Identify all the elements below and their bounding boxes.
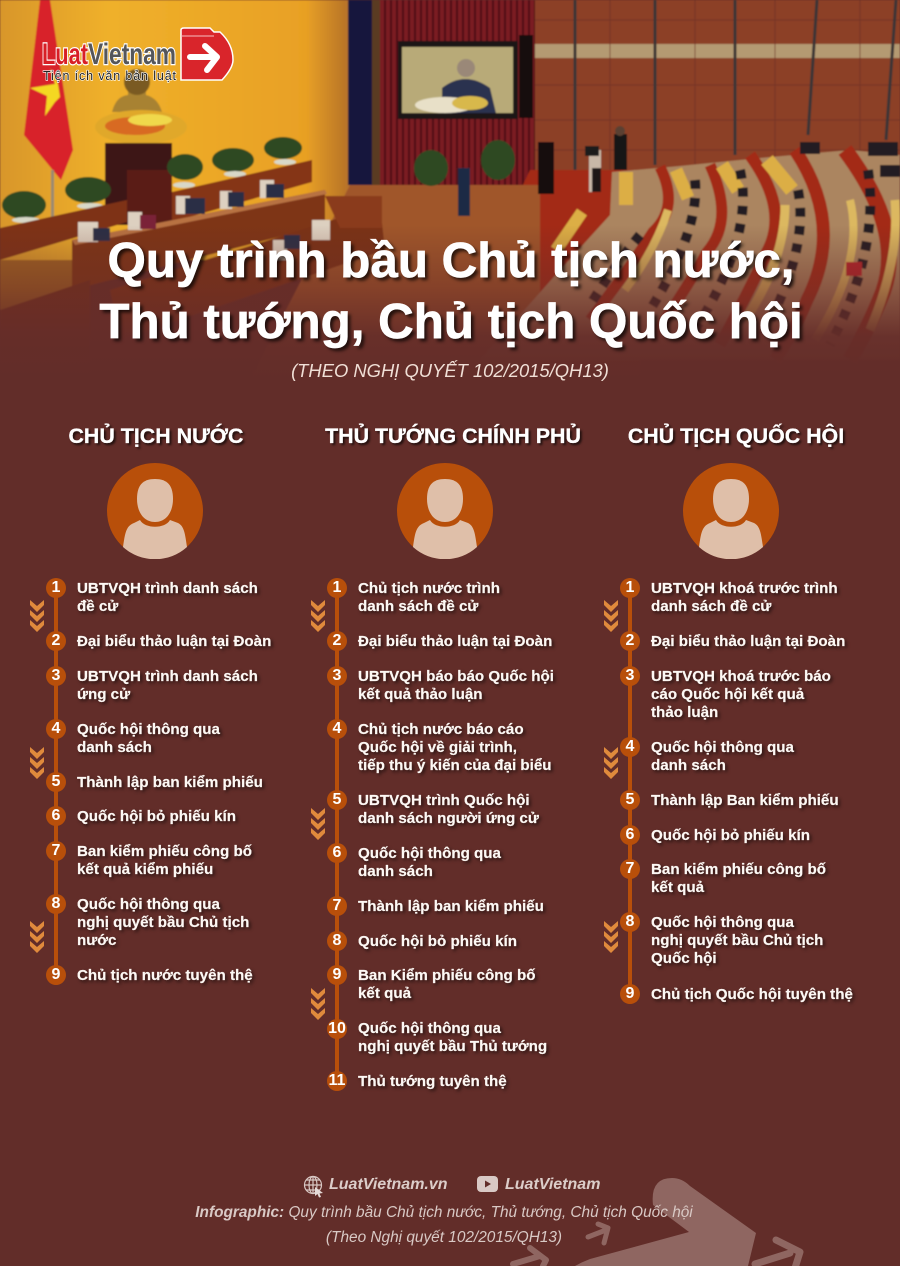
icon: globe cursor [304,1176,323,1198]
panel: steps Thủ tướng [311,578,556,1092]
panel: steps Thủ tướng: Chủ tịch nước báo cáo [358,721,524,738]
panel: steps Thủ tướng: kết quả [358,985,411,1002]
heading: Thủ tướng Chính phủ: THỦ TƯỚNG CHÍNH PHỦ [325,424,581,448]
logo wordmark [42,38,176,71]
panel: steps Chủ tịch Quốc hội [604,578,856,1006]
panel: steps Thủ tướng: tiếp thu ý kiến của đại biểu [358,757,552,774]
title: Quy trình bầu Chủ tịch nước, [108,233,794,288]
panel: steps Thủ tướng: Đại biểu thảo luận tại Đoàn [358,633,552,650]
chevrons [311,600,325,632]
panel: steps Thủ tướng: Quốc hội thông qua [358,1020,501,1037]
panel: steps Chủ tịch nước: Quốc hội thông qua [77,721,220,738]
panel: steps Chủ tịch nước [30,578,274,986]
delegate seat blocks [480,150,900,360]
chevrons [30,600,44,632]
footer credit: (Theo Nghị quyết 102/2015/QH13) [326,1229,562,1246]
panel: steps Chủ tịch nước: Ban kiểm phiếu công bố [77,843,252,860]
panel: steps Chủ tịch Quốc hội: danh sách đề cử [651,598,771,615]
panel: steps Thủ tướng: Thành lập ban kiểm phiếu [358,898,544,915]
panel: steps Chủ tịch Quốc hội: Chủ tịch Quốc hội tuyên thệ [651,986,853,1003]
panel: steps Thủ tướng: danh sách đề cử [358,598,478,615]
hero photo: National Assembly hall [0,0,900,340]
panel: steps Chủ tịch Quốc hội: Đại biểu thảo luận tại Đoàn [651,633,845,650]
panel: steps Chủ tịch Quốc hội: 7 [626,860,634,877]
panel: steps Thủ tướng: nghị quyết bầu Thủ tướng [358,1038,547,1055]
panel: steps Chủ tịch nước: 6 [52,807,60,824]
panel: steps Chủ tịch nước: Chủ tịch nước tuyên thệ [77,967,253,984]
panel: steps Chủ tịch nước: Quốc hội thông qua [77,896,220,913]
panel: steps Thủ tướng: Quốc hội về giải trình, [358,739,517,756]
panel: steps Thủ tướng: Thủ tướng tuyên thệ [358,1073,507,1090]
panel: steps Chủ tịch nước: nghị quyết bầu Chủ tịch [77,914,249,931]
panel: steps Thủ tướng: Quốc hội bỏ phiếu kín [358,933,517,950]
panel: steps Chủ tịch nước: UBTVQH trình danh sách [77,668,258,685]
icon: avatar Thủ tướng [397,463,493,559]
panel: steps Chủ tịch nước: ứng cử [77,686,130,703]
logo tagline: Tiện ích văn bản luật [43,69,177,83]
panel: steps Thủ tướng: 3 [333,667,341,684]
footer credit [195,1204,693,1246]
heading: Chủ tịch nước: CHỦ TỊCH NƯỚC [68,424,244,448]
panel: steps Chủ tịch Quốc hội: nghị quyết bầu Chủ tịch [651,932,823,949]
plants [2,137,515,219]
panel: steps Thủ tướng: Quốc hội thông qua [358,845,501,862]
panel: steps Chủ tịch Quốc hội: 8 [626,913,634,930]
panel: steps Chủ tịch nước: UBTVQH trình danh sách [77,580,258,597]
panel: steps Chủ tịch Quốc hội: kết quả [651,879,704,896]
panel: steps Chủ tịch nước: Quốc hội bỏ phiếu kín [77,808,236,825]
flag [24,0,73,180]
text: channel: LuatVietnam [505,1176,600,1193]
panel: steps Thủ tướng: UBTVQH báo báo Quốc hội [358,668,554,685]
panel: steps Chủ tịch Quốc hội: 4 [626,738,634,755]
panel: steps Chủ tịch nước: 5 [52,773,60,790]
panel: steps Chủ tịch nước: 2 [52,632,60,649]
chevrons [604,600,618,632]
panel: steps Thủ tướng: 2 [333,632,341,649]
panel: steps Chủ tịch Quốc hội: UBTVQH khoá trước báo [651,668,831,685]
panel: steps Chủ tịch Quốc hội: 2 [626,632,634,649]
logo wordmark: Vietnam [88,38,176,71]
panel: steps Chủ tịch nước: 9 [52,966,60,983]
panel: steps Thủ tướng: 8 [333,932,341,949]
title [99,233,804,353]
panel: steps Chủ tịch Quốc hội: Ban kiểm phiếu công bố [651,861,826,878]
panel: steps Thủ tướng: 11 [329,1072,345,1089]
panel: steps Chủ tịch nước: 1 [52,579,60,596]
text: website: LuatVietnam.vn [329,1176,448,1193]
panel: steps Thủ tướng: 1 [333,579,341,596]
camera operators [589,150,601,192]
panel: steps Thủ tướng: danh sách [358,863,433,880]
panel: steps Chủ tịch Quốc hội: 1 [626,579,634,596]
panel: steps Thủ tướng: 7 [333,897,341,914]
panel: steps Thủ tướng: kết quả thảo luận [358,686,483,703]
panel: steps Chủ tịch Quốc hội: Quốc hội thông qua [651,739,794,756]
panel: steps Thủ tướng: 5 [333,791,341,808]
bust [112,74,162,112]
panel: steps Chủ tịch Quốc hội: Quốc hội bỏ phiếu kín [651,827,810,844]
screen [398,41,518,119]
logo folder arrow icon [181,28,233,80]
panel: steps Thủ tướng: UBTVQH trình Quốc hội [358,792,530,809]
desks [0,200,127,260]
panel: steps Chủ tịch nước: danh sách [77,739,152,756]
logo: LuatVietnam [42,27,234,83]
panel: steps Chủ tịch Quốc hội: cáo Quốc hội kết quả [651,686,804,703]
gradient fade into page background [0,225,900,380]
panel: steps Chủ tịch Quốc hội: 5 [626,791,634,808]
icon: video play [477,1176,498,1192]
panel: steps Chủ tịch nước: 4 [52,720,60,737]
seated officials [78,180,330,260]
panel: steps Chủ tịch Quốc hội: thảo luận [651,704,718,721]
footer: website and channel links [304,1176,600,1198]
panel: steps Thủ tướng: Ban Kiểm phiếu công bố [358,967,536,984]
panel: steps Chủ tịch nước: 7 [52,842,60,859]
icon: avatar Chủ tịch nước [107,463,203,559]
panel: steps Thủ tướng: 9 [333,966,341,983]
panel: steps Chủ tịch Quốc hội: UBTVQH khoá trước trình [651,580,838,597]
panel: steps Chủ tịch Quốc hội: 9 [626,985,634,1002]
panel: steps Chủ tịch nước: Thành lập ban kiểm phiếu [77,774,263,791]
panel: steps Thủ tướng: 4 [333,720,341,737]
panel: steps Chủ tịch nước: kết quả kiểm phiếu [77,861,213,878]
watermark arrows [510,1178,804,1266]
panel: steps Thủ tướng: 6 [333,844,341,861]
panel: steps Thủ tướng: danh sách người ứng cử [358,810,539,827]
panel: steps Chủ tịch nước: 3 [52,667,60,684]
subtitle: (THEO NGHỊ QUYẾT 102/2015/QH13) [291,360,609,381]
panel: steps Chủ tịch nước: Đại biểu thảo luận tại Đoàn [77,633,271,650]
panel: steps Chủ tịch nước: 8 [52,895,60,912]
icon: avatar Chủ tịch Quốc hội [683,463,779,559]
floor [430,170,640,380]
panel: steps Chủ tịch nước: đề cử [77,598,118,615]
title: Thủ tướng, Chủ tịch Quốc hội [99,294,803,349]
panel: steps Chủ tịch Quốc hội: 6 [626,826,634,843]
panel: steps Chủ tịch Quốc hội: danh sách [651,757,726,774]
footer credit: Infographic: Quy trình bầu Chủ tịch nước, Thủ tướng, Chủ tịch Quốc hội [195,1204,693,1221]
heading: Chủ tịch Quốc hội: CHỦ TỊCH QUỐC HỘI [628,424,844,448]
panel: steps Thủ tướng: 10 [328,1020,346,1037]
panel: steps Chủ tịch nước: nước [77,932,116,949]
panel: steps Chủ tịch Quốc hội: Quốc hội [651,950,717,967]
panel: steps Chủ tịch Quốc hội: Thành lập Ban kiểm phiếu [651,792,839,809]
logo wordmark: Luat [42,38,88,71]
panel: steps Chủ tịch Quốc hội: 3 [626,667,634,684]
panel: steps Thủ tướng: Chủ tịch nước trình [358,580,500,597]
panel: steps Chủ tịch Quốc hội: Quốc hội thông qua [651,914,794,931]
